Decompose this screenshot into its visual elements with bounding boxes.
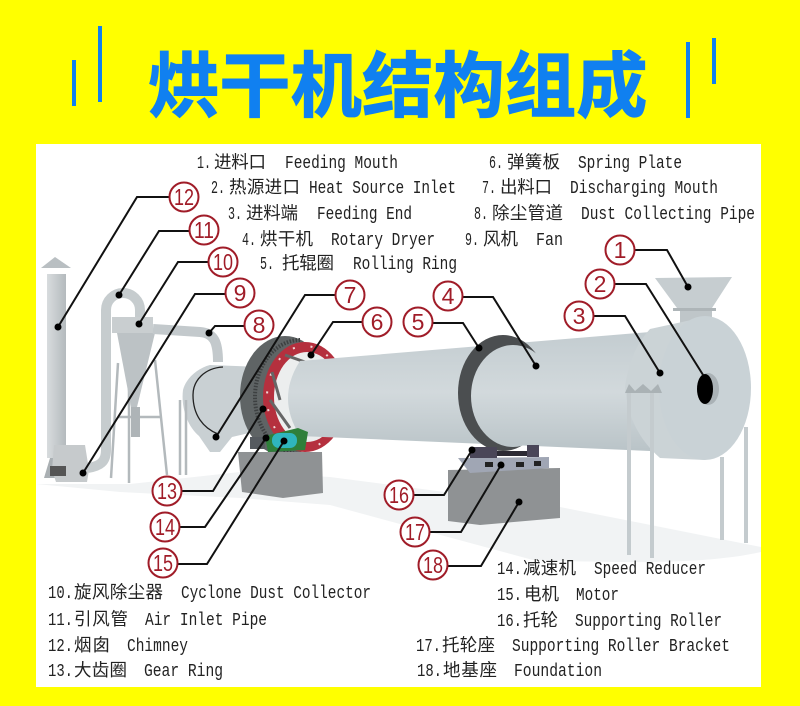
legend: top parts 1-9: 热源进口 bbox=[229, 177, 300, 197]
callout 4: 4 bbox=[442, 283, 455, 309]
legend: left parts 10-13: Chimney bbox=[127, 636, 188, 657]
rolling ring bbox=[458, 335, 555, 451]
callout 15: 15 bbox=[153, 550, 173, 576]
legend: top parts 1-9: 2. bbox=[211, 178, 225, 199]
legend: top parts 1-9: 4. bbox=[242, 230, 256, 251]
legend: right parts 14-18: Foundation bbox=[514, 661, 602, 682]
motor and speed reducer bbox=[250, 428, 308, 452]
legend: top parts 1-9: Heat Source Inlet bbox=[309, 178, 456, 199]
legend: right parts 14-18 bbox=[416, 558, 730, 682]
legend: top parts 1-9: Rolling Ring bbox=[353, 254, 457, 275]
rotary dryer drum bbox=[288, 332, 650, 451]
callout 8: 8 bbox=[253, 312, 265, 338]
legend: top parts 1-9: Feeding End bbox=[317, 204, 412, 225]
legend: top parts 1-9 bbox=[197, 152, 755, 275]
legend: top parts 1-9: Fan bbox=[536, 230, 563, 251]
legend: right parts 14-18: 15. bbox=[497, 585, 522, 606]
legend: top parts 1-9: 进料口 bbox=[214, 152, 266, 172]
callout 6 bbox=[308, 308, 392, 358]
callout 16: 16 bbox=[389, 482, 409, 508]
callout 14: 14 bbox=[155, 514, 175, 540]
cyclone dust collector bbox=[111, 317, 167, 483]
legend: left parts 10-13: 引风管 bbox=[74, 609, 128, 629]
callout 7 bbox=[212, 280, 364, 440]
callout 12: 12 bbox=[174, 184, 194, 210]
legend: left parts 10-13: 烟囱 bbox=[74, 635, 110, 655]
callout 5 bbox=[404, 308, 482, 352]
legend: top parts 1-9: 风机 bbox=[483, 229, 518, 249]
callout 13: 13 bbox=[157, 478, 177, 504]
legend: left parts 10-13: 旋风除尘器 bbox=[74, 582, 163, 602]
supporting rollers bbox=[470, 445, 539, 458]
legend: top parts 1-9: 1. bbox=[197, 153, 211, 174]
callout 18: 18 bbox=[423, 552, 443, 578]
air inlet pipe bbox=[88, 293, 140, 468]
callout 18 bbox=[418, 498, 522, 580]
legend: right parts 14-18: 16. bbox=[497, 611, 522, 632]
legend: top parts 1-9: Feeding Mouth bbox=[285, 153, 398, 174]
legend: left parts 10-13: 11. bbox=[48, 610, 73, 631]
ground shadow bbox=[36, 472, 761, 562]
callout 10: 10 bbox=[213, 249, 233, 275]
callout 3: 3 bbox=[573, 303, 585, 329]
foundation: left bbox=[238, 452, 323, 498]
legend: right parts 14-18: Motor bbox=[576, 585, 619, 606]
legend: top parts 1-9: 8. bbox=[474, 204, 488, 225]
callout 15 bbox=[148, 438, 288, 578]
callout 5: 5 bbox=[412, 309, 424, 335]
callout 2: 2 bbox=[594, 271, 606, 297]
legend: right parts 14-18: 14. bbox=[497, 559, 522, 580]
callout 11 bbox=[116, 216, 218, 298]
legend: left parts 10-13: 12. bbox=[48, 636, 73, 657]
panel: diagram bbox=[36, 144, 761, 687]
legend: top parts 1-9: 9. bbox=[465, 230, 479, 251]
title bbox=[72, 26, 716, 127]
title: 烘干机结构组成 bbox=[148, 48, 648, 127]
legend: top parts 1-9: Rotary Dryer bbox=[331, 230, 435, 251]
callout 13 bbox=[152, 406, 266, 506]
legend: right parts 14-18: 18. bbox=[417, 661, 442, 682]
callout 9: 9 bbox=[234, 280, 246, 306]
callout 4 bbox=[434, 282, 540, 370]
legend: top parts 1-9: 除尘管道 bbox=[492, 203, 563, 223]
supports bbox=[625, 384, 748, 558]
legend: top parts 1-9: Spring Plate bbox=[578, 153, 682, 174]
callouts with leader lines bbox=[54, 182, 708, 580]
legend: top parts 1-9: Discharging Mouth bbox=[570, 178, 718, 199]
legend: right parts 14-18: 减速机 bbox=[523, 558, 576, 578]
legend: right parts 14-18: 地基座 bbox=[443, 660, 497, 680]
callout 17 bbox=[400, 462, 504, 546]
legend: right parts 14-18: Speed Reducer bbox=[594, 559, 706, 580]
legend: top parts 1-9: 7. bbox=[482, 178, 496, 199]
legend: left parts 10-13 bbox=[48, 582, 371, 682]
callout 16 bbox=[384, 446, 476, 510]
callout 12 bbox=[54, 182, 198, 330]
chimney bbox=[41, 257, 71, 478]
legend: left parts 10-13: 13. bbox=[48, 661, 73, 682]
legend: top parts 1-9: 托辊圈 bbox=[282, 253, 334, 273]
callout 3 bbox=[564, 302, 664, 376]
fan bbox=[50, 445, 89, 482]
legend: top parts 1-9: 6. bbox=[489, 153, 503, 174]
gear ring bbox=[240, 336, 347, 456]
legend: top parts 1-9: 弹簧板 bbox=[507, 152, 560, 172]
callout 14 bbox=[150, 434, 270, 542]
legend: right parts 14-18: 17. bbox=[416, 636, 441, 657]
callout 6: 6 bbox=[371, 309, 383, 335]
legend: top parts 1-9: 烘干机 bbox=[260, 229, 314, 249]
legend: top parts 1-9: 5. bbox=[260, 254, 274, 275]
legend: left parts 10-13: 大齿圈 bbox=[74, 660, 127, 680]
legend: left parts 10-13: 10. bbox=[48, 583, 73, 604]
callout 17: 17 bbox=[405, 519, 425, 545]
legend: left parts 10-13: Air Inlet Pipe bbox=[145, 610, 267, 631]
legend: right parts 14-18: Supporting Roller bbox=[575, 611, 722, 632]
legend: right parts 14-18: 电机 bbox=[524, 584, 560, 604]
callout 11: 11 bbox=[194, 217, 214, 243]
legend: left parts 10-13: Cyclone Dust Collector bbox=[181, 583, 371, 604]
callout 2 bbox=[586, 270, 708, 382]
discharge hood bbox=[180, 365, 262, 475]
legend: top parts 1-9: 3. bbox=[228, 204, 242, 225]
legend: top parts 1-9: 进料端 bbox=[246, 203, 298, 223]
callout 7: 7 bbox=[344, 282, 356, 308]
callout 1 bbox=[606, 236, 692, 290]
legend: left parts 10-13: Gear Ring bbox=[144, 661, 223, 682]
legend: top parts 1-9: Dust Collecting Pipe bbox=[581, 204, 755, 225]
foundation: right bbox=[448, 457, 560, 525]
legend: right parts 14-18: Supporting Roller Bracket bbox=[512, 636, 730, 657]
callout 1: 1 bbox=[614, 237, 626, 263]
feeding end with hopper bbox=[625, 277, 751, 460]
callout 9 bbox=[80, 278, 254, 476]
dust collecting pipe bbox=[153, 329, 218, 362]
callout 8 bbox=[206, 310, 274, 340]
legend: right parts 14-18: 托轮座 bbox=[442, 635, 495, 655]
legend: right parts 14-18: 托轮 bbox=[523, 610, 558, 630]
callout 10 bbox=[136, 248, 238, 328]
legend: top parts 1-9: 出料口 bbox=[500, 177, 552, 197]
